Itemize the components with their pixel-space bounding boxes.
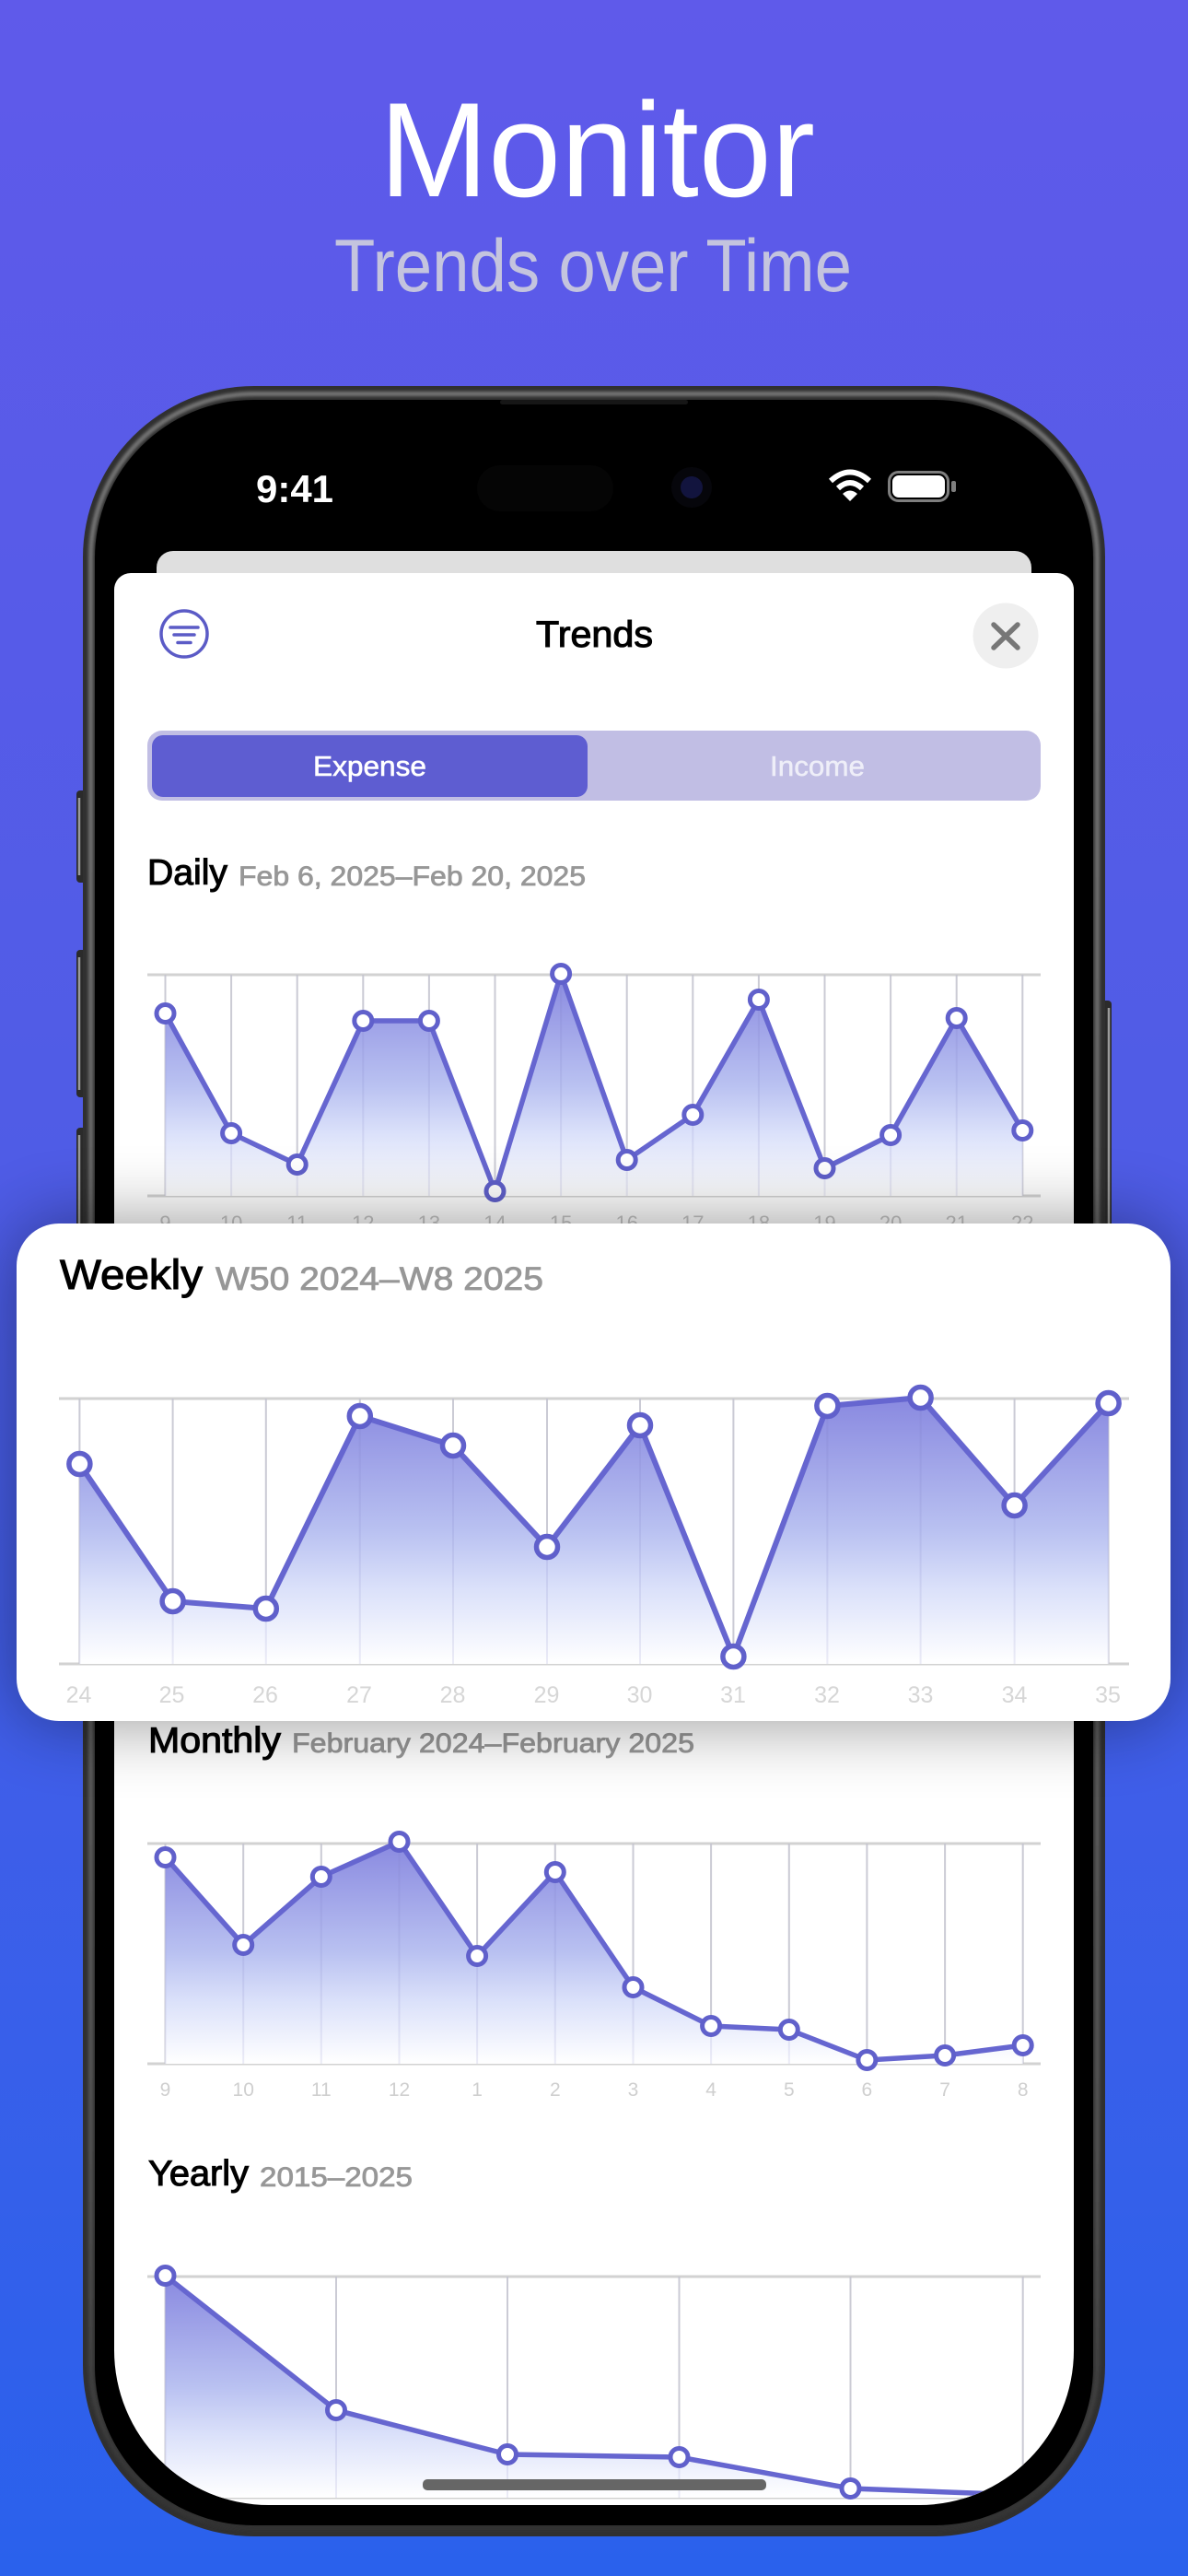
daily line chart: 9: [159, 1212, 171, 1235]
phone mockup: [76, 386, 1112, 2576]
weekly line chart: 30: [627, 1682, 652, 1708]
monthly line chart: 3: [628, 2079, 638, 2101]
sheet background: [114, 573, 1074, 2576]
weekly line chart: 31: [720, 1682, 746, 1708]
daily line chart: [147, 966, 1041, 1235]
daily line chart: 15: [550, 1212, 572, 1235]
daily line chart: 19: [813, 1212, 836, 1235]
daily line chart: 22: [1011, 1212, 1034, 1235]
card background: [17, 1224, 1171, 1721]
weekly line chart: 35: [1095, 1682, 1121, 1708]
daily line chart: 21: [945, 1212, 968, 1235]
weekly card shadow: [17, 1224, 1171, 1721]
monthly line chart: 11: [311, 2079, 332, 2101]
daily heading: Feb 6, 2025–Feb 20, 2025: [239, 861, 586, 892]
monthly line chart: 8: [1018, 2079, 1029, 2101]
subtitle: Trends over Time: [334, 225, 852, 308]
title: Monitor: [379, 75, 815, 225]
daily line chart: 12: [352, 1212, 375, 1235]
weekly line chart: [59, 1388, 1129, 1708]
weekly line chart: 33: [908, 1682, 933, 1708]
daily line chart: 17: [681, 1212, 705, 1235]
icon: filter: [161, 611, 207, 657]
weekly line chart: 26: [252, 1682, 278, 1708]
monthly line chart: 4: [705, 2079, 716, 2101]
speaker slit: [500, 400, 688, 404]
weekly line chart: 29: [534, 1682, 559, 1708]
yearly heading: [147, 2159, 412, 2193]
background sheet: [157, 551, 1031, 590]
yearly line chart: [147, 2266, 1041, 2504]
segmented control: [147, 731, 1041, 801]
monthly line chart: 10: [233, 2079, 254, 2101]
monthly line chart: [147, 1833, 1041, 2101]
monthly heading: February 2024–February 2025: [292, 1728, 694, 1759]
weekly line chart: 25: [159, 1682, 184, 1708]
left side buttons: [76, 790, 87, 1275]
monthly line chart: 7: [939, 2079, 950, 2101]
segmented control: Income: [770, 750, 865, 782]
dynamic island: [477, 465, 613, 511]
weekly heading: W50 2024–W8 2025: [215, 1261, 543, 1297]
status time: 9:41: [256, 467, 333, 510]
icon: battery: [890, 472, 956, 501]
panel: trends sheet: [114, 573, 1074, 2576]
daily line chart: 14: [483, 1212, 507, 1235]
daily heading: [149, 858, 586, 892]
right side button: [1101, 1001, 1112, 1231]
weekly line chart: 28: [440, 1682, 465, 1708]
daily line chart: 20: [879, 1212, 902, 1235]
yearly heading: Yearly: [148, 2154, 250, 2194]
yearly heading: 2015–2025: [260, 2162, 413, 2193]
weekly line chart: 24: [66, 1682, 91, 1708]
weekly line chart: 32: [814, 1682, 840, 1708]
weekly line chart: 34: [1002, 1682, 1027, 1708]
monthly line chart: 1: [472, 2079, 483, 2101]
daily line chart: 16: [615, 1212, 638, 1235]
icon: wifi: [831, 472, 869, 501]
weekly heading: Weekly: [60, 1251, 204, 1298]
monthly line chart: 5: [784, 2079, 795, 2101]
sheet heading: Trends: [536, 615, 653, 655]
monthly heading: Monthly: [148, 1721, 282, 1761]
monthly heading: [151, 1726, 694, 1760]
weekly line chart: 27: [346, 1682, 372, 1708]
front camera: [671, 467, 712, 508]
close button: [973, 603, 1039, 669]
segmented control: Expense: [313, 750, 426, 782]
home indicator: [423, 2479, 766, 2490]
panel: weekly card: [17, 1224, 1171, 1721]
daily line chart: 18: [748, 1212, 770, 1235]
monthly line chart: 9: [160, 2079, 170, 2101]
phone frame: [83, 386, 1105, 2536]
monthly line chart: 2: [550, 2079, 561, 2101]
daily line chart: 11: [286, 1212, 308, 1235]
daily heading: Daily: [147, 853, 227, 893]
weekly heading: [60, 1251, 543, 1298]
monthly line chart: 12: [389, 2079, 410, 2101]
daily line chart: 13: [418, 1212, 440, 1235]
daily line chart: 10: [220, 1212, 242, 1235]
monthly line chart: 6: [862, 2079, 872, 2101]
